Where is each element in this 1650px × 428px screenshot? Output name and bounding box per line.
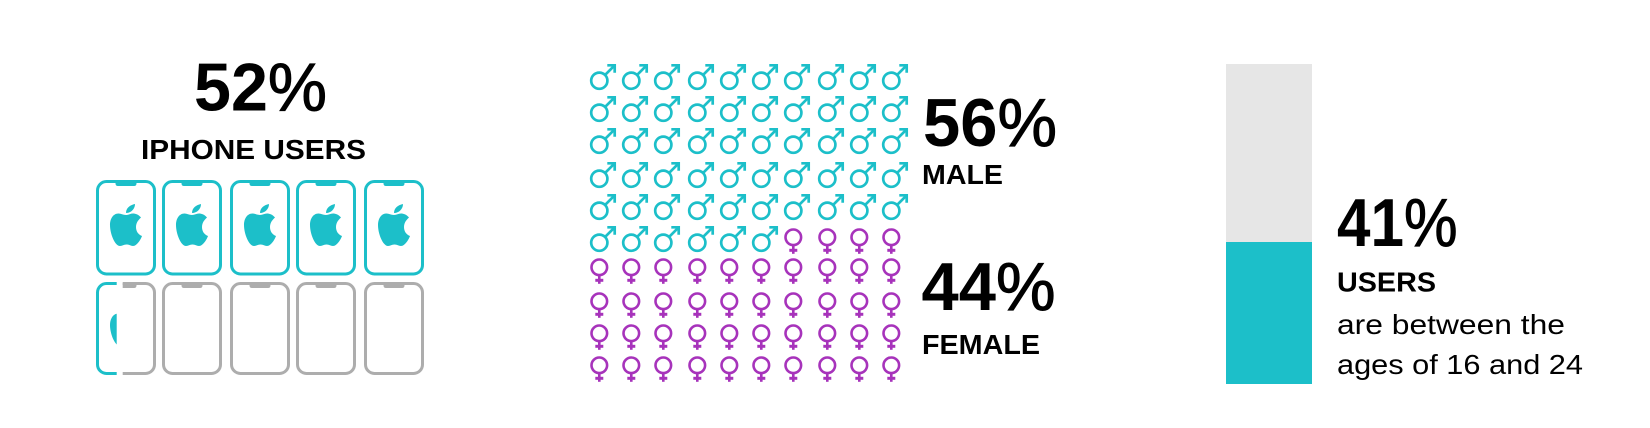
age description: are between the <box>1337 309 1565 340</box>
panel: gender split <box>591 65 1057 382</box>
gender symbol grid <box>591 65 907 382</box>
panel: iPhone users <box>98 50 422 373</box>
progress bar <box>1226 64 1312 384</box>
users label: USERS <box>1337 267 1436 298</box>
grey phone 2 <box>164 283 220 374</box>
iPhone users label: IPHONE USERS <box>141 134 366 165</box>
female percentage: 44% <box>922 249 1056 325</box>
grey phone 3 <box>232 283 288 374</box>
partially filled phone <box>98 283 154 374</box>
age percentage: 41% <box>1337 185 1458 261</box>
female label: FEMALE <box>922 329 1040 360</box>
phone with apple 4 <box>298 181 354 274</box>
male percentage: 56% <box>923 85 1057 161</box>
grey phone 4 <box>298 283 354 374</box>
phone with apple 3 <box>232 181 288 274</box>
phone with apple 1 <box>98 181 154 274</box>
panel: age group <box>1226 64 1583 384</box>
age description: ages of 16 and 24 <box>1337 349 1583 380</box>
phone pictogram grid <box>98 181 422 374</box>
age description <box>1337 309 1583 380</box>
grey phone 5 <box>366 283 422 374</box>
iPhone percentage: 52% <box>194 50 327 126</box>
phone with apple 5 <box>366 181 422 274</box>
male label: MALE <box>922 159 1003 190</box>
phone with apple 2 <box>164 181 220 274</box>
